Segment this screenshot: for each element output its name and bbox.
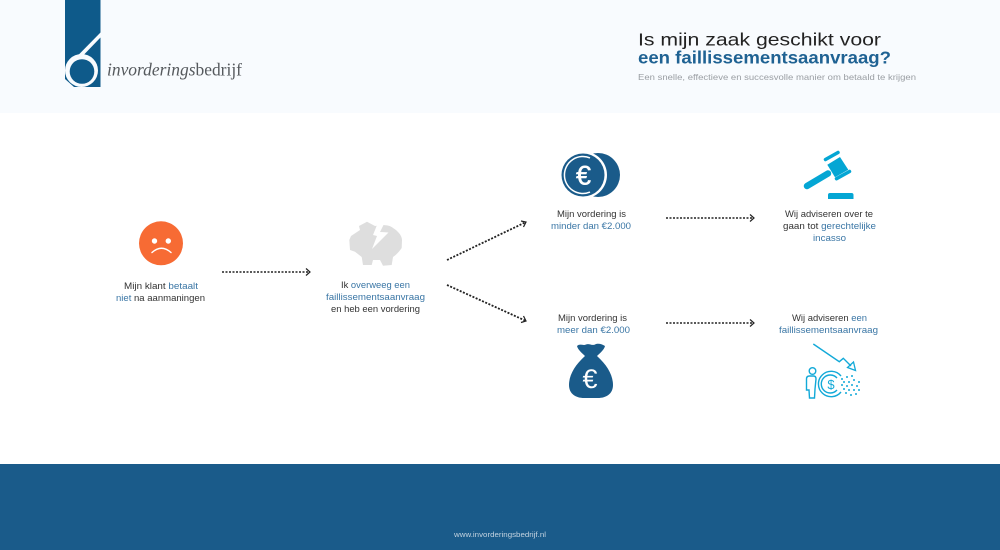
subtitle: Een snelle, effectieve en succesvolle manier om betaald te krijgen [638, 72, 916, 82]
text: step 2: en heb een vordering [331, 304, 420, 315]
text: court advice [783, 209, 876, 244]
icon: money bag: € [582, 364, 598, 394]
text: more than 2000 [557, 313, 630, 336]
text: step 1 [116, 281, 205, 304]
text: step 2 [326, 280, 425, 315]
footer url: www.invorderingsbedrijf.nl [453, 530, 546, 539]
arrow: to higher than 2000 [447, 285, 526, 322]
arrow: to court advice [666, 214, 754, 222]
text: step 2: Ik overweeg een [341, 280, 410, 291]
arrow: step 1 to step 2 [222, 268, 310, 276]
text: step 1: niet na aanmaningen [116, 293, 205, 304]
title: Is mijn zaak geschikt voor [638, 30, 881, 50]
title [638, 30, 891, 68]
icon: euro coins [560, 152, 620, 198]
text: court advice: gaan tot gerechtelijke [783, 221, 876, 232]
arrow: to bankruptcy advice [666, 320, 754, 326]
icon: euro coins: € [576, 160, 591, 190]
text: court advice: incasso [813, 233, 846, 244]
icon: gavel [807, 152, 854, 199]
text: less than 2000 [551, 209, 631, 232]
logo [65, 0, 242, 87]
text: more than 2000: Mijn vordering is [558, 313, 627, 324]
footer band [0, 464, 1000, 550]
text: less than 2000: Mijn vordering is [557, 209, 626, 220]
text: less than 2000: minder dan €2.000 [551, 221, 631, 232]
text: step 2: faillissementsaanvraag [326, 292, 425, 303]
header band [0, 0, 1000, 113]
text: bankruptcy advice: Wij adviseren een [792, 313, 867, 324]
icon: falling money and person [806, 344, 860, 398]
logo: invorderingsbedrijf [107, 60, 242, 80]
text: bankruptcy advice [779, 313, 878, 336]
text: step 1: Mijn klant betaalt [124, 281, 198, 292]
icon: sad face [139, 221, 183, 265]
text: more than 2000: meer dan €2.000 [557, 325, 630, 336]
title: een faillissementsaanvraag? [638, 48, 891, 68]
text: bankruptcy advice: faillissementsaanvraag [779, 325, 878, 336]
icon: falling money and person: $ [827, 377, 835, 392]
icon: money bag [569, 344, 613, 398]
icon: broken piggy bank [349, 222, 402, 266]
arrow: to lower than 2000 [447, 221, 526, 260]
text: court advice: Wij adviseren over te [785, 209, 873, 220]
